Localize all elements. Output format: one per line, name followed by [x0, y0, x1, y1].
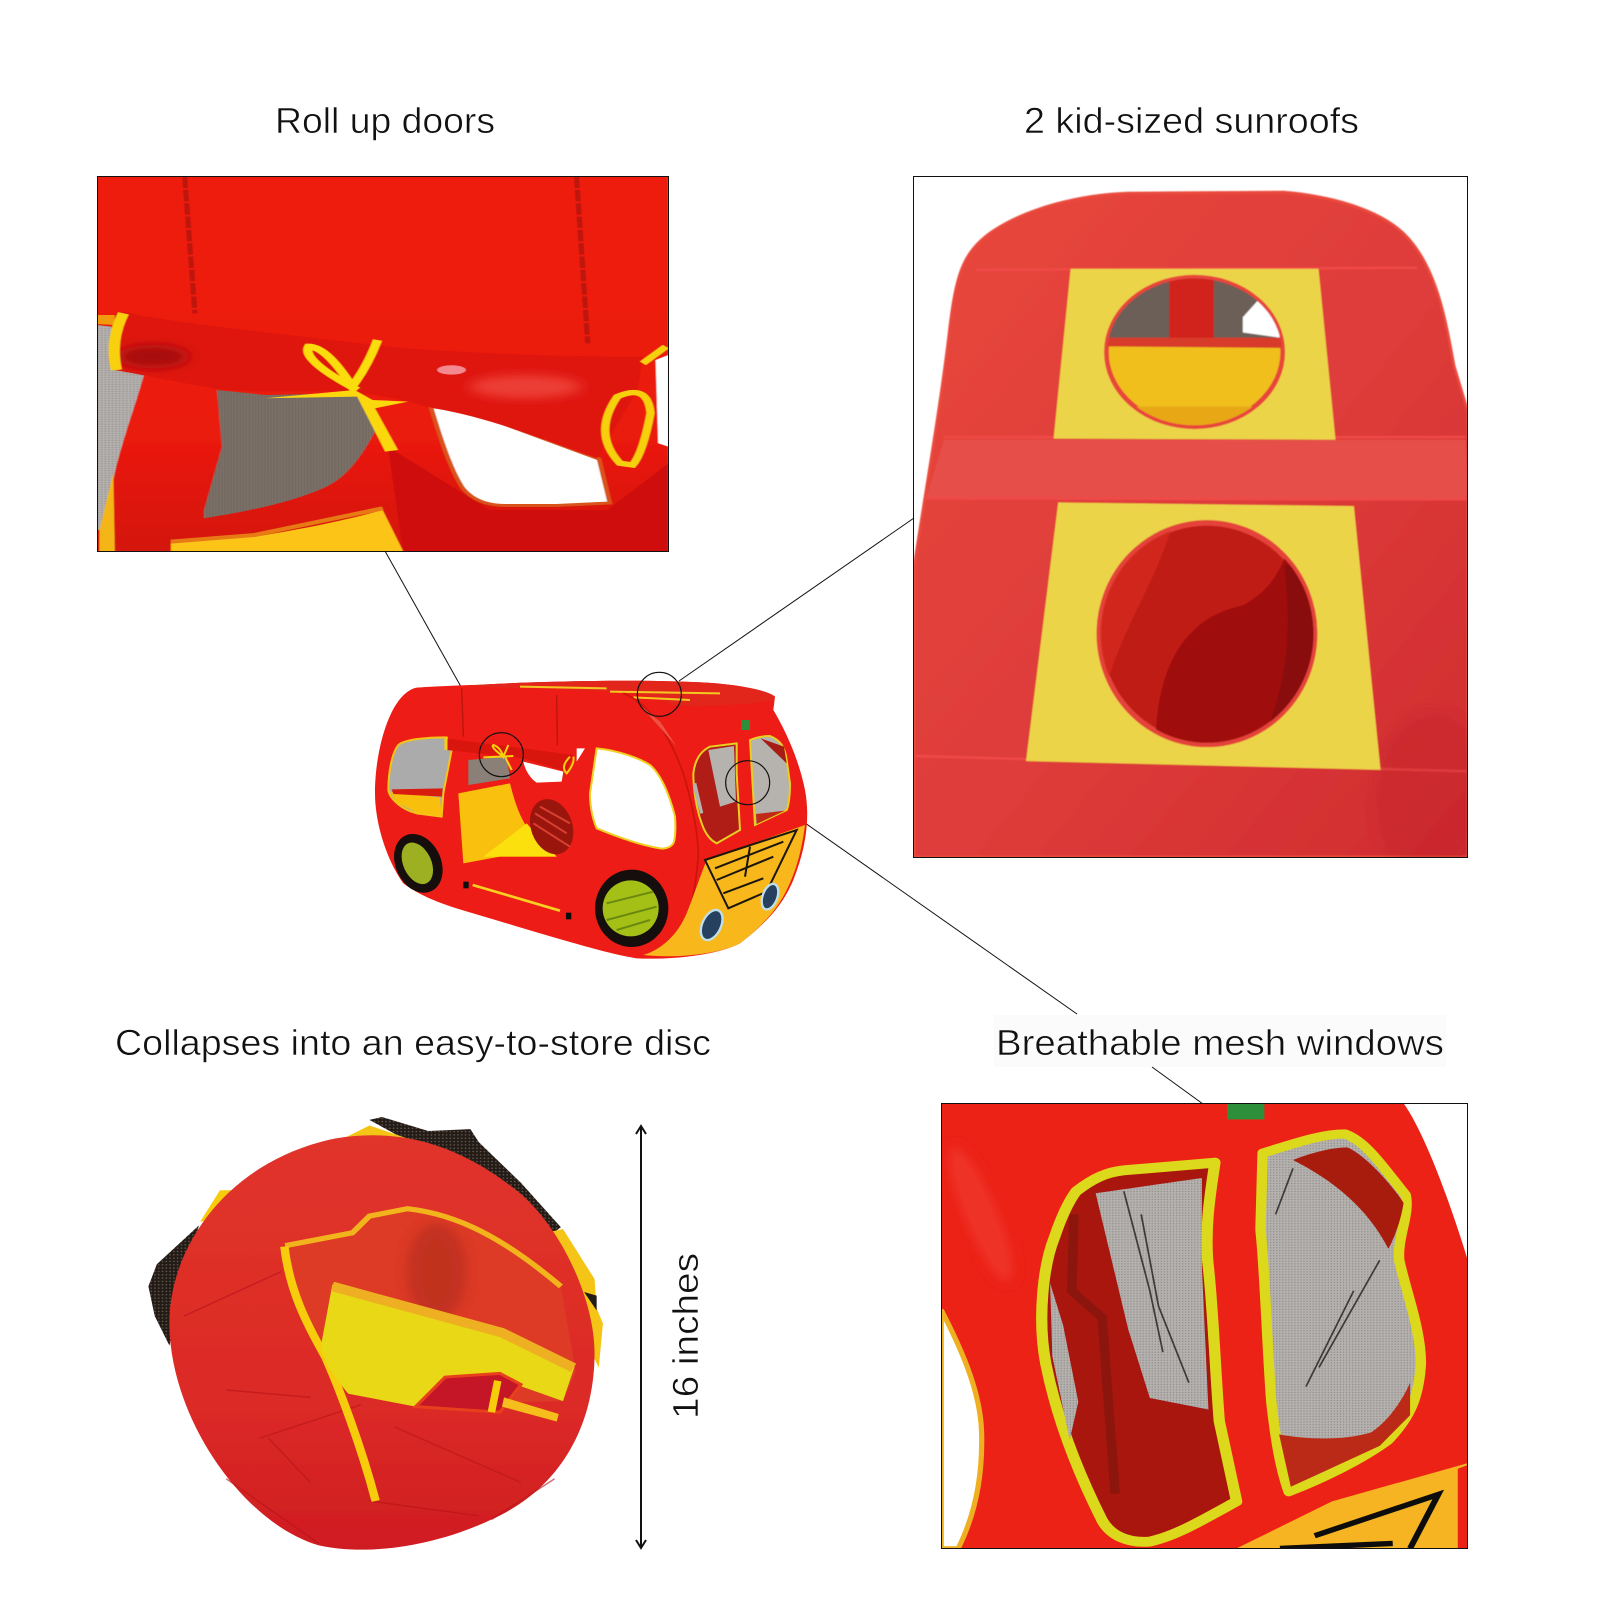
dimension label: 16 inches: 16 inches: [665, 1253, 706, 1419]
window trim: [285, 1209, 561, 1286]
left wheel arch cut-out: [941, 1310, 982, 1548]
main white window: [590, 748, 675, 849]
side stripe: [473, 885, 560, 911]
heading: 2 kid-sized sunroofs: 2 kid-sized sunroofs: [1024, 100, 1359, 141]
callout circle: sunroof: [637, 672, 681, 716]
see-through window: [285, 1209, 576, 1405]
callout circle: mesh window: [726, 761, 770, 805]
central photo: bus play tent: [375, 672, 807, 959]
front left window: [693, 743, 740, 843]
green tag: [741, 720, 750, 730]
left window: [1042, 1163, 1237, 1542]
photo panel: sunroofs: [914, 192, 1486, 876]
mesh edges: [148, 1225, 199, 1346]
front right window: [750, 736, 790, 825]
heading: Roll up doors: Roll up doors: [275, 100, 495, 141]
rear side window: [388, 737, 452, 817]
heading: Collapses into an easy-to-store disc: Collapses into an easy-to-store disc: [115, 1022, 711, 1063]
leader line: sunroofs to bus: [679, 518, 914, 681]
infographic: bus tent features: [97, 107, 1468, 1550]
bus body: [375, 681, 807, 959]
photo panel: mesh windows: [936, 1103, 1468, 1548]
right window: [1260, 1134, 1421, 1492]
yellow door panel: [458, 783, 557, 863]
dimension arrow: 16 inches: [636, 1126, 646, 1548]
back opening: [523, 762, 563, 783]
leader line: roll up doors to bus: [385, 551, 488, 735]
rear wheel: [385, 826, 452, 901]
disc body: [169, 1135, 595, 1550]
yellow door flap: [321, 1285, 575, 1407]
leader line: label to mesh panel: [1152, 1067, 1203, 1104]
panel border: roll up doors: [98, 176, 668, 552]
grille panel corner: [1237, 1463, 1468, 1548]
panel border: sunroofs: [914, 176, 1468, 858]
wrinkles: [184, 1272, 555, 1544]
callout circle: door tie: [479, 733, 523, 777]
headlights: [696, 907, 727, 943]
leader line: mesh windows to bus: [768, 797, 1077, 1014]
heading with backing: Breathable mesh windows: Breathable mesh windows: [996, 1022, 1444, 1063]
front wheel: [595, 870, 668, 947]
photo: collapsed disc: [148, 1117, 603, 1550]
mesh behind door: [468, 757, 510, 785]
grille panel: [643, 825, 805, 956]
photo panel: roll up doors: [97, 176, 668, 551]
panel border: mesh windows: [942, 1104, 1468, 1548]
rolled up door: [445, 738, 573, 772]
bus roof: [460, 681, 775, 706]
dark side window: [523, 793, 581, 860]
